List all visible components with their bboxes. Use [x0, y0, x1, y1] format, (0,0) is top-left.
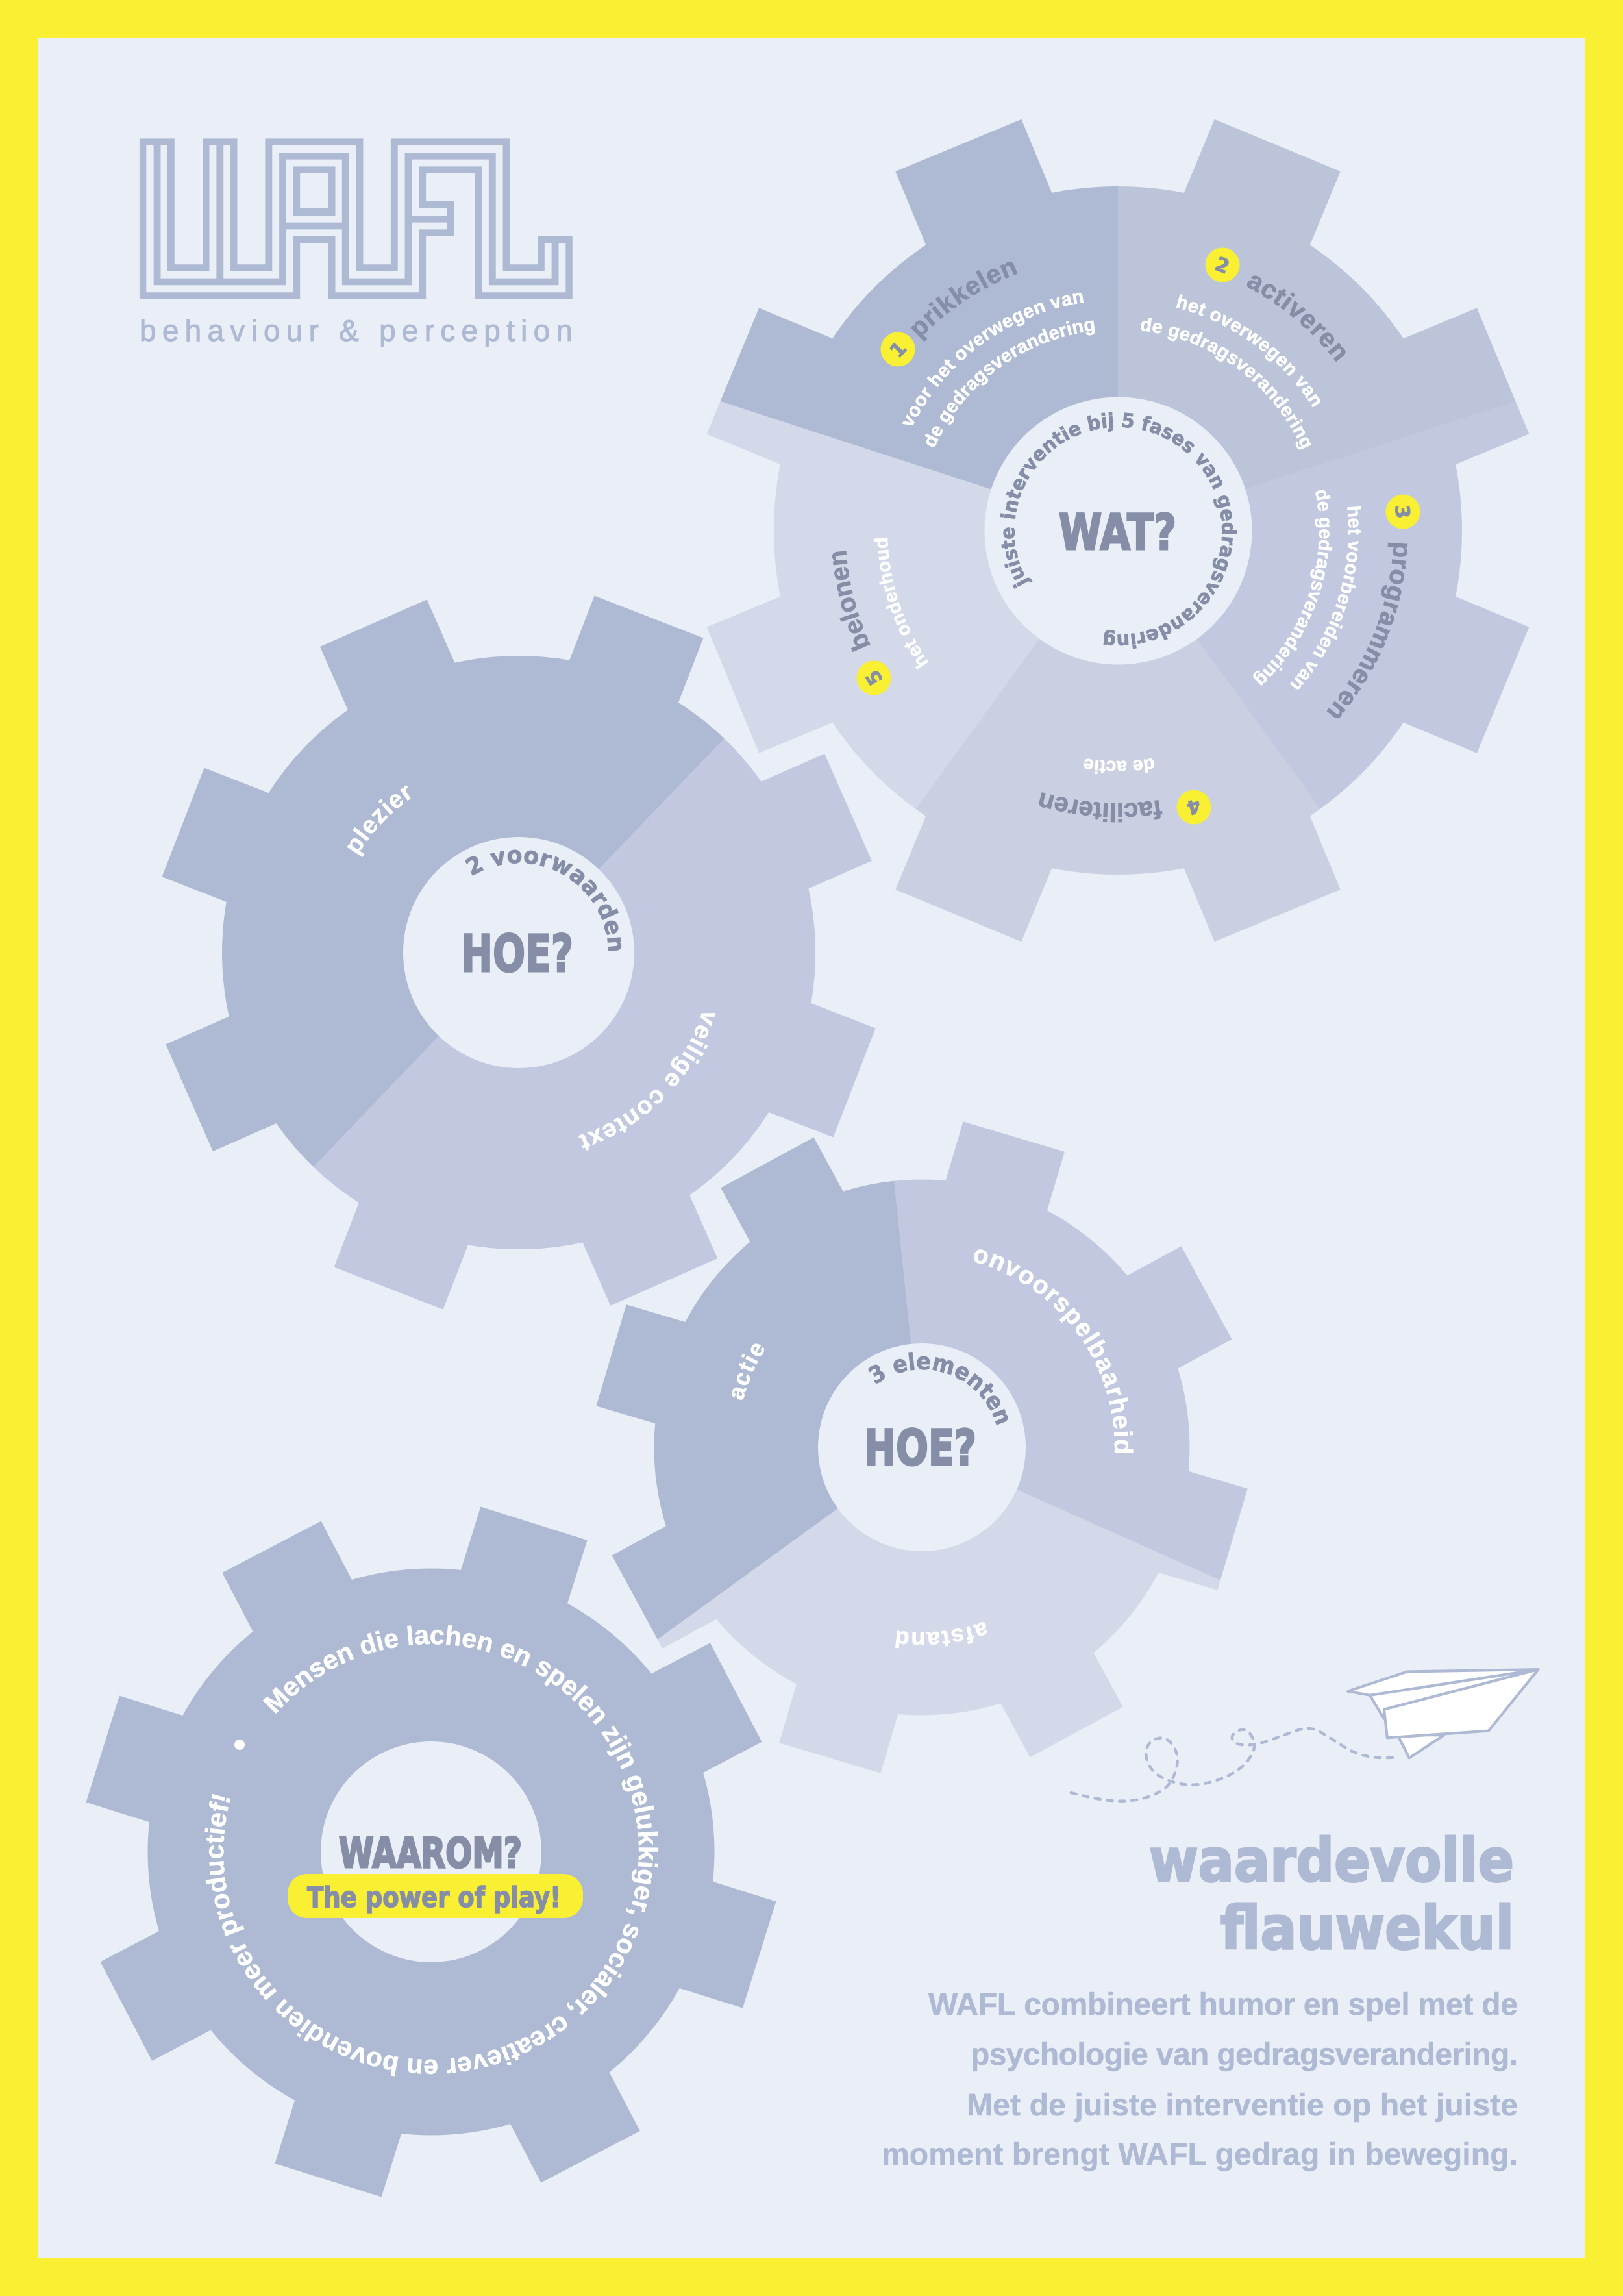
badge 1: 1: [886, 337, 911, 363]
hub: [818, 1343, 1026, 1551]
badge 3: [1385, 493, 1421, 530]
gear body with five coloured slices: [325, 0, 1623, 1330]
hub heading: HOE?: [461, 925, 573, 984]
label veilige context: veilige context: [578, 1013, 715, 1151]
label plezier: plezier: [347, 785, 411, 857]
text de actie: de actie: [1084, 758, 1154, 774]
paragraph: Met de juiste interventie op het juiste: [967, 2088, 1518, 2123]
hub: [403, 837, 634, 1068]
logo: WAFL: [140, 138, 573, 347]
label faciliteren: faciliteren: [1039, 792, 1162, 822]
heading: waardevolle flauwekul: [1149, 1826, 1514, 1963]
gear: HOE? two conditions: [162, 596, 875, 1309]
pill text: The power of play!: [307, 1881, 561, 1914]
label belonen: belonen: [832, 551, 871, 652]
icon: dashed flight path: [1071, 1728, 1395, 1801]
logo tagline: behaviour & perception: [140, 314, 573, 347]
gear body with two slices: [162, 596, 875, 1309]
label onvoorspelbaarheid: onvoorspelbaarheid: [974, 1249, 1134, 1453]
paragraph: psychologie van gedragsverandering.: [971, 2038, 1518, 2072]
heading: waardevolle flauwekul: waardevolle: [1149, 1826, 1514, 1895]
text het overwegen van: het overwegen van: [1176, 294, 1320, 408]
badge 1: [874, 325, 922, 373]
badge 4: 4: [1184, 793, 1203, 819]
curved statement: Mensen die lachen en spelen zijn gelukkiger, socialer, creatiever en bovendien meer productief!: [204, 1625, 658, 2077]
badge 2: 2: [1211, 253, 1233, 279]
paragraph: [882, 1988, 1518, 2172]
hub heading: WAAROM?: [339, 1830, 522, 1878]
heading: waardevolle flauwekul: flauwekul: [1220, 1893, 1514, 1963]
hub ring text: juiste interventie bij 5 fases van gedragsverandering: [1000, 412, 1237, 649]
label programmeren: programmeren: [1327, 543, 1407, 718]
text de gedragsverandering 3: de gedragsverandering: [1253, 490, 1332, 686]
hub heading: HOE?: [864, 1419, 976, 1477]
badge 2: [1200, 243, 1245, 287]
text voor het overwegen van: voor het overwegen van: [902, 292, 1084, 426]
badge 4: [1172, 786, 1215, 829]
hub: [321, 1741, 541, 1962]
gear: WAAROM? power of play: [86, 1506, 776, 2197]
text het voorbereiden van: het voorbereiden van: [1290, 506, 1361, 690]
label activeren: activeren: [1246, 275, 1345, 362]
badge 3: 3: [1390, 504, 1414, 519]
badge 5: 5: [861, 666, 888, 689]
text de gedragsverandering 2: de gedragsverandering: [1141, 318, 1311, 449]
gear: HOE? three elements: [596, 1122, 1248, 1773]
gear: WAT? five phases: [325, 119, 1530, 1344]
hub heading: WAT?: [1059, 503, 1176, 561]
label actie: actie: [732, 1344, 764, 1400]
text het onderhoud: het onderhoud: [874, 538, 928, 669]
label afstand: afstand: [895, 1622, 987, 1648]
icon: paper plane: [1348, 1669, 1538, 1758]
badge 5: [850, 655, 897, 701]
gear body: [86, 1507, 776, 2197]
yellow pill: [288, 1874, 583, 1918]
label prikkelen: prikkelen: [910, 261, 1018, 342]
hub: [984, 397, 1252, 665]
hub ring text: 3 elementen: [867, 1352, 1008, 1425]
logo mark: WAFL maze lettering: [140, 138, 573, 299]
text de gedragsverandering 1: de gedragsverandering: [924, 321, 1095, 447]
hub ring text: 2 voorwaarden: [465, 849, 622, 951]
paragraph: moment brengt WAFL gedrag in beweging.: [882, 2138, 1518, 2172]
paragraph: WAFL combineert humor en spel met de: [928, 1988, 1518, 2022]
gear body with three slices: [596, 1122, 1248, 1773]
dot: [234, 1740, 245, 1750]
